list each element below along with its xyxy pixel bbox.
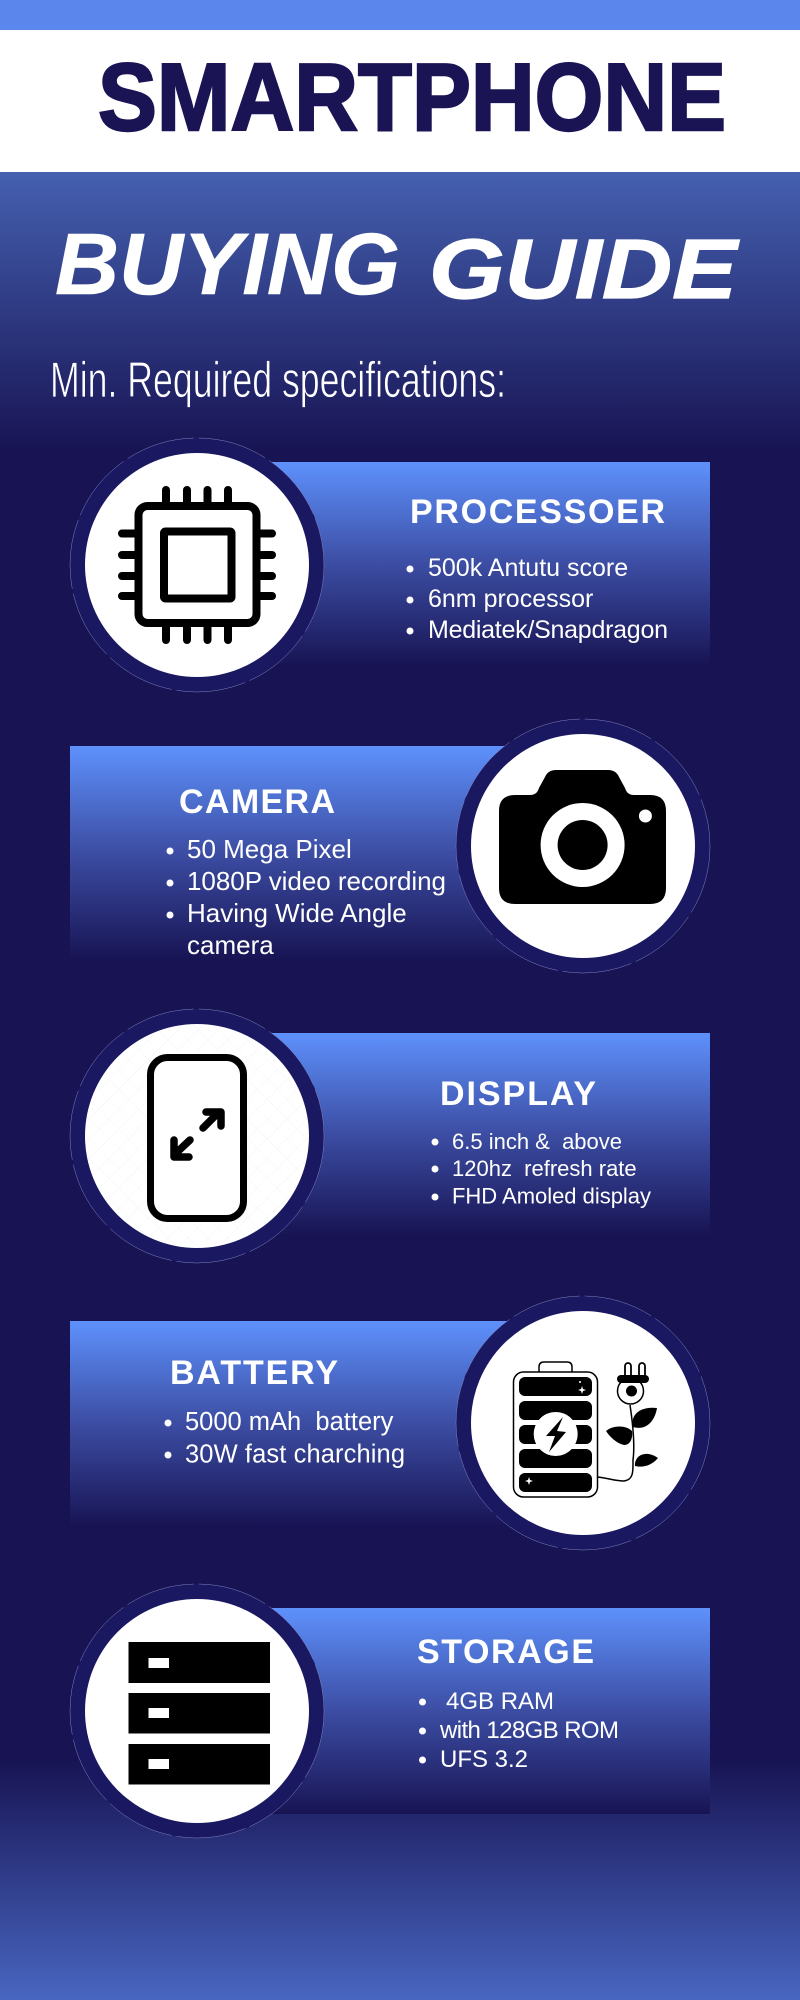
heading: buying guide: GUIDE [429, 222, 740, 316]
panel: display [70, 1009, 710, 1263]
panel: processor [70, 438, 710, 692]
top band [0, 0, 800, 30]
spec list: display: 6.5 inch & above [452, 1129, 622, 1154]
heading: buying guide [55, 216, 740, 316]
spec list: battery [164, 1408, 405, 1468]
spec list: processor [406, 554, 668, 644]
heading: battery: BATTERY [170, 1354, 338, 1392]
panel: battery [70, 1296, 710, 1550]
panel: storage [70, 1584, 710, 1838]
spec list: storage [419, 1688, 619, 1773]
spec list: processor: 500k Antutu score [428, 554, 628, 582]
icon: battery with plug [514, 1362, 658, 1497]
title band [0, 30, 800, 172]
heading: processor: PROCESSOER [410, 493, 665, 531]
spec list: storage: UFS 3.2 [440, 1746, 528, 1773]
subheading: Min. Required specifications: [50, 352, 506, 408]
spec list: display: 120hz refresh rate [452, 1156, 637, 1181]
spec list: camera: 50 Mega Pixel [187, 834, 352, 864]
spec list: display: FHD Amoled display [452, 1184, 651, 1208]
icon: phone with resize arrows [150, 1058, 244, 1218]
spec list: processor: 6nm processor [428, 585, 593, 613]
spec list: camera: Having Wide Angle [187, 898, 407, 928]
panel: camera [70, 719, 710, 973]
spec list: camera: 1080P video recording [187, 866, 446, 896]
spec list: display [432, 1129, 651, 1208]
icon: processor chip [122, 490, 272, 640]
heading: buying guide: BUYING [55, 216, 400, 313]
heading: display: DISPLAY [440, 1075, 596, 1113]
spec list: storage: with 128GB ROM [439, 1717, 619, 1744]
heading: camera: CAMERA [179, 783, 335, 821]
spec list: battery: 5000 mAh battery [185, 1408, 394, 1436]
spec list: battery: 30W fast charching [185, 1440, 405, 1468]
spec list: camera [166, 834, 446, 960]
heading: storage: STORAGE [417, 1633, 594, 1671]
spec list: storage: 4GB RAM [446, 1688, 554, 1715]
spec list: camera: camera [187, 930, 274, 960]
icon: storage server [128, 1642, 270, 1784]
spec list: processor: Mediatek/Snapdragon [428, 616, 668, 644]
title: smartphone: SMARTPHONE [98, 44, 726, 151]
icon: camera [499, 770, 666, 904]
